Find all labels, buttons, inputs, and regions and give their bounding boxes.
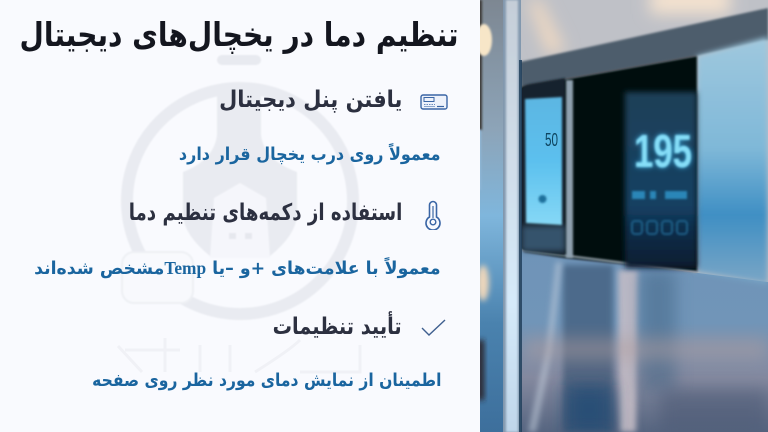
icon: check mark bbox=[422, 320, 446, 336]
title: تنظیم دما در یخچال‌های دیجیتال bbox=[20, 15, 459, 54]
control panel bbox=[521, 56, 697, 272]
heading: find panel: یافتن پنل دیجیتال bbox=[219, 87, 402, 113]
right digital display: 195 bbox=[634, 125, 692, 177]
right blurred reflection bbox=[697, 37, 768, 284]
panel: watermark background bbox=[118, 55, 362, 374]
left small screen: 50 bbox=[545, 130, 558, 150]
text: confirm settings description: اطمینان از نمایش دمای مورد نظر روی صفحه bbox=[92, 371, 441, 391]
heading: use buttons: استفاده از دکمه‌های تنظیم دما bbox=[128, 200, 402, 226]
icon: display panel bbox=[420, 94, 448, 110]
lower metal door bbox=[520, 250, 768, 432]
right digital display: 195 bbox=[634, 125, 692, 177]
icon: thermometer bbox=[425, 200, 441, 230]
right digital display bbox=[625, 92, 697, 268]
panel: refrigerator photo bbox=[480, 0, 768, 432]
upper frame band bbox=[520, 8, 768, 87]
text: find panel description: معمولاً روی درب یخچال قرار دارد bbox=[179, 145, 441, 165]
left background strip bbox=[476, 0, 505, 432]
heading: confirm settings: تأیید تنظیمات bbox=[273, 314, 402, 340]
door pillar bbox=[503, 0, 522, 432]
left small screen bbox=[525, 97, 562, 225]
text: use buttons description: معمولاً با علامت‌های +و –یا Tempمشخص شده‌اند bbox=[35, 258, 441, 279]
ceiling highlights bbox=[528, 0, 730, 55]
